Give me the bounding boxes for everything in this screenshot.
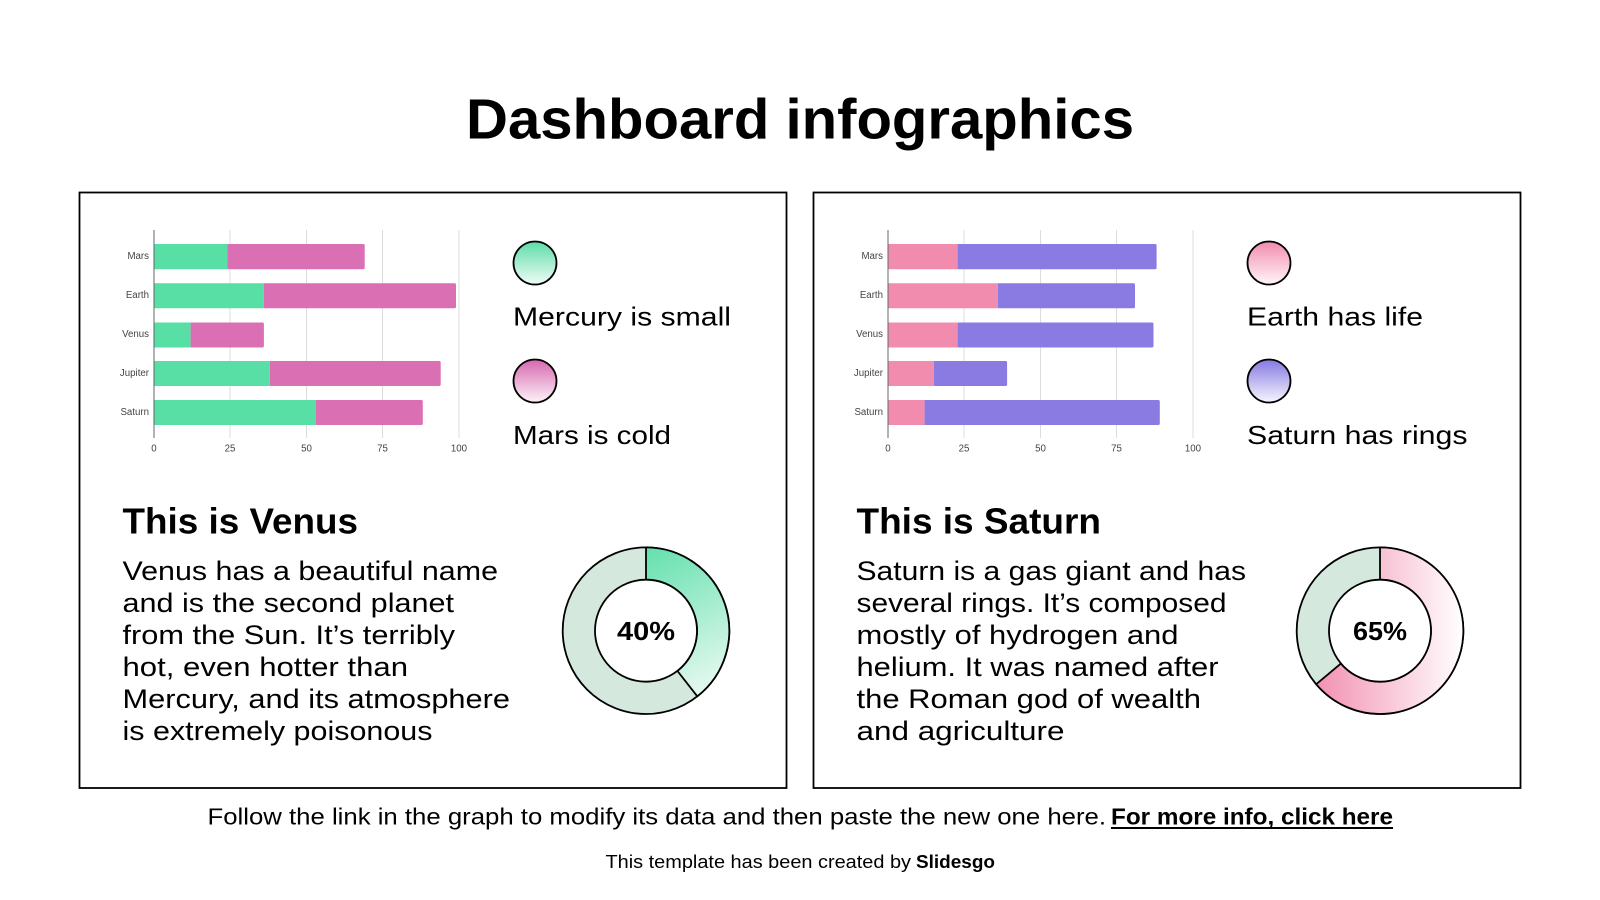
text block: Saturn description bbox=[856, 556, 1246, 746]
text block: Saturn description: Saturn is a gas giant and has bbox=[856, 556, 1246, 586]
stacked bar chart: Saturn panel: 100 bbox=[1185, 444, 1202, 454]
donut chart: 65%: 65% bbox=[1353, 616, 1407, 646]
stacked bar chart: Venus panel: Saturn bbox=[120, 407, 149, 418]
stacked bar chart: Venus panel: 50 bbox=[301, 444, 312, 454]
stacked bar chart: Saturn panel: Earth bbox=[860, 290, 883, 301]
text block: Venus description: Venus has a beautiful name bbox=[122, 556, 498, 586]
stacked bar chart: Venus panel: Jupiter bbox=[120, 368, 150, 379]
stacked bar chart: Saturn panel: Mars bbox=[861, 251, 883, 262]
text block: Saturn description: several rings. It’s composed bbox=[856, 588, 1226, 618]
instruction text: Follow the link in the graph to modify its data and then paste the new one here. bbox=[208, 804, 1106, 830]
title: Dashboard infographics bbox=[466, 88, 1134, 152]
text block: Venus description: hot, even hotter than bbox=[122, 652, 408, 682]
donut chart: 65% bbox=[1297, 547, 1463, 714]
stacked bar chart: Venus panel: Mars bbox=[127, 251, 149, 262]
stacked bar chart: Saturn panel: 75 bbox=[1111, 444, 1122, 454]
text block: Venus description: Mercury, and its atmosphere bbox=[122, 684, 510, 714]
stacked bar chart: Saturn panel bbox=[854, 230, 1202, 454]
text block: Saturn description: and agriculture bbox=[856, 716, 1064, 746]
stacked bar chart: Saturn panel: 0 bbox=[885, 444, 891, 454]
heading: This is Saturn: This is Saturn bbox=[856, 501, 1101, 542]
stacked bar chart: Saturn panel: Saturn bbox=[854, 407, 883, 418]
text block: Saturn description: the Roman god of wealth bbox=[856, 684, 1201, 714]
link: more info: For more info, click here bbox=[1111, 804, 1393, 830]
stacked bar chart: Saturn panel: Venus bbox=[856, 329, 883, 340]
donut chart: 40% bbox=[563, 547, 729, 714]
credit text: Slidesgo bbox=[916, 852, 995, 872]
stacked bar chart: Saturn panel: 25 bbox=[959, 444, 969, 454]
stacked bar chart: Venus panel: Earth bbox=[126, 290, 149, 301]
text block: Venus description: from the Sun. It’s terribly bbox=[122, 620, 456, 650]
legend icon: rose circle bbox=[1248, 242, 1290, 284]
credit text: This template has been created by bbox=[606, 852, 911, 872]
stacked bar chart: Saturn panel: 50 bbox=[1035, 444, 1046, 454]
stacked bar chart: Venus panel: 25 bbox=[225, 444, 235, 454]
panel: Venus bbox=[80, 192, 786, 788]
stacked bar chart: Venus panel: 75 bbox=[377, 444, 388, 454]
panel: Saturn bbox=[814, 192, 1520, 788]
legend icon: purple circle bbox=[1248, 360, 1290, 402]
stacked bar chart: Saturn panel: Jupiter bbox=[854, 368, 884, 379]
stacked bar chart: Venus panel: 0 bbox=[151, 444, 157, 454]
text block: Saturn description: helium. It was named after bbox=[856, 652, 1219, 682]
legend label: Mercury: Mercury is small bbox=[513, 302, 731, 332]
donut chart: 40%: 40% bbox=[617, 616, 675, 646]
legend icon: green circle bbox=[514, 242, 556, 284]
legend label: Mars: Mars is cold bbox=[513, 420, 671, 450]
heading: This is Venus: This is Venus bbox=[122, 501, 358, 542]
legend label: Saturn: Saturn has rings bbox=[1247, 420, 1468, 450]
legend label: Earth: Earth has life bbox=[1247, 302, 1423, 332]
legend icon: pink circle bbox=[514, 360, 556, 402]
stacked bar chart: Venus panel bbox=[120, 230, 468, 454]
text block: Venus description: is extremely poisonous bbox=[122, 716, 432, 746]
stacked bar chart: Venus panel: Venus bbox=[122, 329, 149, 340]
stacked bar chart: Venus panel: 100 bbox=[451, 444, 468, 454]
text block: Venus description: and is the second planet bbox=[122, 588, 455, 618]
text block: Saturn description: mostly of hydrogen and bbox=[856, 620, 1178, 650]
text block: Venus description bbox=[122, 556, 510, 746]
